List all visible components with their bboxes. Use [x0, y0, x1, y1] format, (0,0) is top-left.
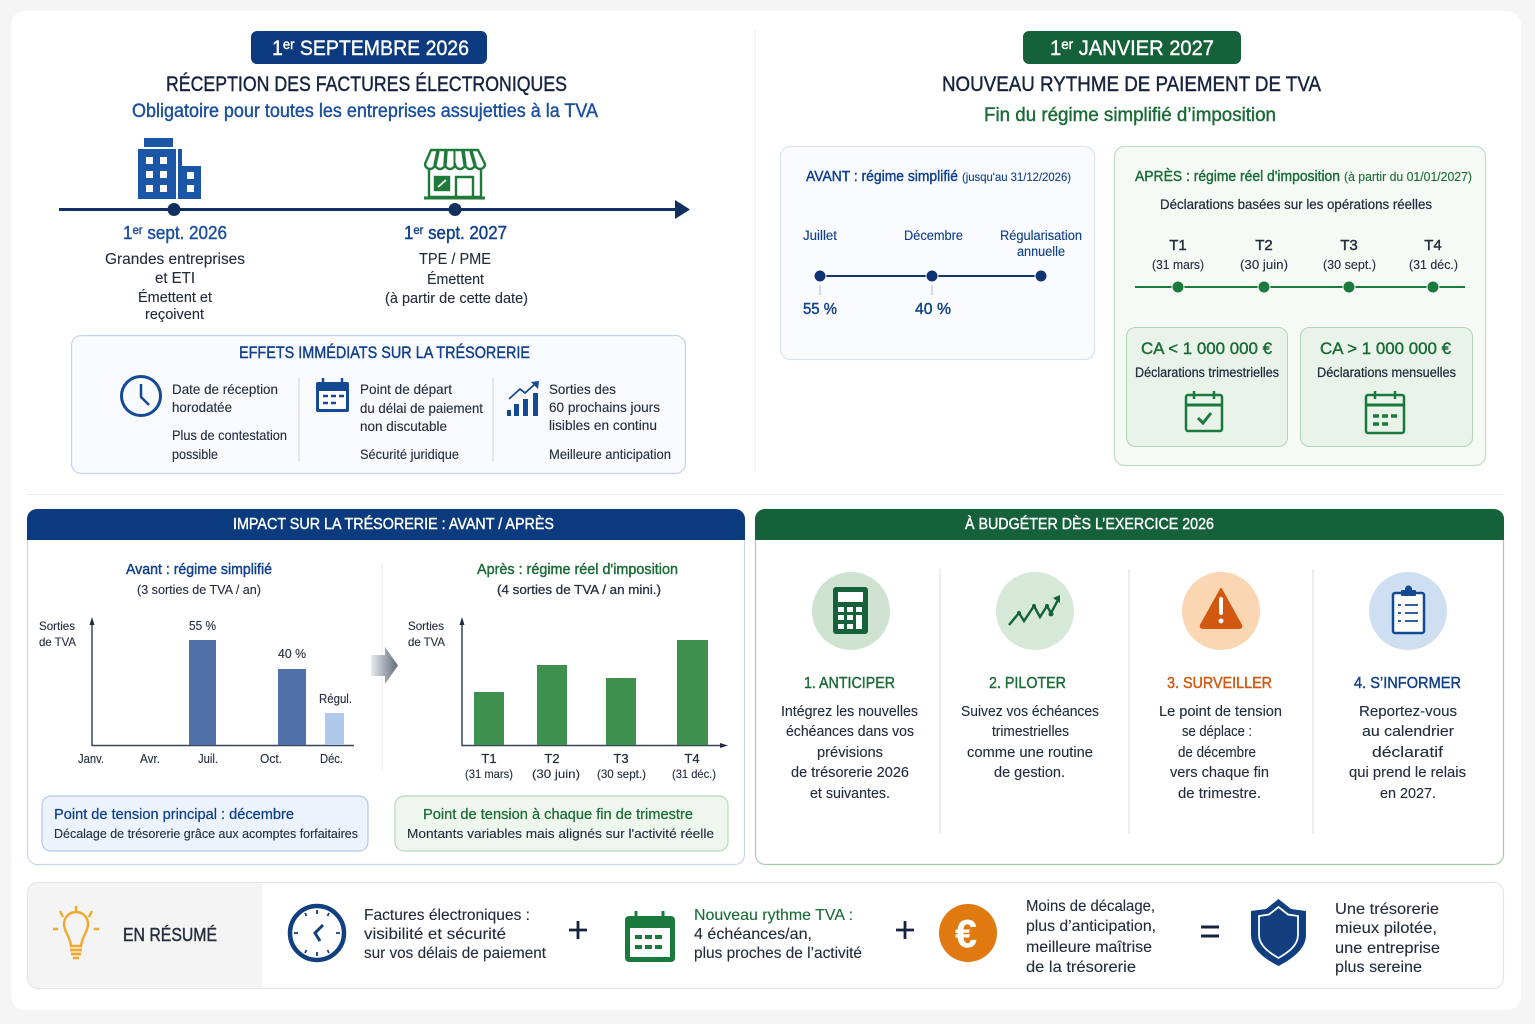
- column: surveiller: [1159, 572, 1282, 802]
- text: une trésorerie: mieux pilotée,: [1335, 920, 1437, 937]
- heading: après: (à partir du 01/01/2027): [1344, 170, 1472, 184]
- heading: avant: [806, 169, 1071, 185]
- timeline step: 1er sept. 2026: er: [132, 223, 143, 237]
- labels: échéances: Décembre: [904, 228, 963, 243]
- text: une trésorerie: une entreprise: [1335, 940, 1440, 957]
- heading: après: APRÈS : régime réel d'imposition: [1135, 168, 1340, 185]
- icon: shield: [1251, 899, 1306, 966]
- bar chart: après: (31 mars): [465, 767, 513, 781]
- bar chart: après: (31 déc.): [672, 767, 716, 781]
- label: en résumé: EN RÉSUMÉ: [123, 925, 217, 945]
- date badge: 1er septembre 2026: SEPTEMBRE 2026: [294, 37, 469, 60]
- column: surveiller: de décembre: [1178, 744, 1256, 761]
- bar chart: avant: de TVA: [39, 635, 76, 649]
- text: déclarations basées: Déclarations basées sur les opérations réelles: [1160, 196, 1432, 212]
- text: date de réception: horodatée: [172, 399, 232, 415]
- text: moins de décalage: plus d’anticipation,: [1026, 918, 1156, 935]
- heading: avant: (jusqu'au 31/12/2026): [962, 170, 1071, 184]
- text: nouveau rythme TVA: 4 échéances/an,: [694, 926, 812, 943]
- column: anticiper: échéances dans vos: [786, 723, 914, 740]
- text: moins de décalage: [1026, 898, 1156, 976]
- timeline step: 1er sept. 2026: 1: [123, 223, 133, 243]
- card: CA supérieur: [1300, 328, 1472, 446]
- timeline: avant: [814, 270, 1047, 295]
- panel: à budgéter: [755, 509, 1504, 864]
- heading: nouveau rythme: NOUVEAU RYTHME DE PAIEMENT DE TVA: [942, 73, 1321, 96]
- panel header: à budgéter: À BUDGÉTER DÈS L’EXERCICE 2026: [965, 516, 1214, 533]
- bar chart: après: T1: [481, 751, 497, 766]
- date badge: 1er septembre 2026: 1: [272, 37, 284, 60]
- text: nouveau rythme TVA: [694, 907, 862, 962]
- text: factures électroniques: Factures électroniques :: [364, 907, 530, 924]
- quarter labels: (30 sept.): [1323, 257, 1376, 272]
- text: factures électroniques: [364, 907, 547, 962]
- text: date de réception: Date de réception: [172, 381, 278, 397]
- bar chart: après: [408, 617, 728, 781]
- heading: effets immédiats: EFFETS IMMÉDIATS SUR LA TRÉSORERIE: [239, 343, 530, 362]
- callout: tension trimestre: [395, 796, 728, 851]
- icon: shop: [424, 150, 485, 198]
- quarter labels: T4: [1424, 237, 1442, 254]
- text: point de départ: Point de départ: [360, 381, 452, 397]
- column: s'informer: 4. S’INFORMER: [1354, 675, 1461, 692]
- quarter labels: T3: [1340, 237, 1358, 254]
- column: piloter: de gestion.: [994, 764, 1065, 781]
- icon: light bulb: [53, 906, 99, 958]
- column: s'informer: déclaratif: [1372, 744, 1444, 761]
- timeline arrow: [59, 200, 690, 219]
- icon: warning: [1182, 572, 1260, 650]
- column: surveiller: Le point de tension: [1159, 703, 1282, 720]
- timeline step: 1er sept. 2026: et ETI: [155, 270, 195, 287]
- timeline step: 1er sept. 2026: Grandes entreprises: [105, 251, 245, 268]
- text: sorties: 60 prochains jours: [549, 399, 660, 415]
- heading: après: [1135, 168, 1472, 185]
- card: CA inférieur: Déclarations trimestrielles: [1135, 365, 1279, 380]
- timeline step: 1er sept. 2027: [385, 223, 528, 307]
- text: date de réception: [172, 381, 287, 462]
- text: nouveau rythme TVA: Nouveau rythme TVA :: [694, 907, 853, 924]
- values: 55 % and 40 %: [803, 301, 951, 318]
- timeline step: 1er sept. 2027: er: [413, 223, 423, 237]
- text: une trésorerie: [1335, 901, 1440, 976]
- text: moins de décalage: meilleure maîtrise: [1026, 939, 1152, 956]
- timeline: trimestres: [1135, 281, 1465, 293]
- arrow: avant vers après: [371, 647, 398, 684]
- column: anticiper: et suivantes.: [810, 785, 890, 802]
- heading: avant: AVANT : régime simplifié: [806, 169, 958, 185]
- icon: calendar: [316, 378, 349, 412]
- bar chart: avant: Déc.: [320, 752, 343, 766]
- icon: office building: [138, 138, 201, 199]
- column: s'informer: [1349, 572, 1466, 802]
- subheading: avant: [126, 562, 272, 597]
- subheading: après: (4 sorties de TVA / an mini.): [497, 582, 661, 597]
- timeline step: 1er sept. 2026: [105, 223, 245, 323]
- bar chart: après: Sorties: [408, 619, 444, 633]
- labels: échéances: [803, 228, 1082, 259]
- callout: tension trimestre: Montants variables mais alignés sur l'activité réelle: [407, 826, 714, 841]
- timeline step: 1er sept. 2026: reçoivent: [145, 306, 205, 323]
- icon: clock: [290, 906, 344, 960]
- bar chart: avant: 40 %: [278, 646, 306, 661]
- column: s'informer: qui prend le relais: [1349, 764, 1466, 781]
- section: 1er janvier 2027: [942, 31, 1321, 126]
- subheading: après: [477, 562, 678, 597]
- quarter labels: T2: [1255, 237, 1273, 254]
- operator: plus: [569, 921, 587, 939]
- text: moins de décalage: de la trésorerie: [1026, 959, 1136, 976]
- quarter labels: (31 mars): [1152, 257, 1204, 272]
- timeline step: 1er sept. 2027: TPE / PME: [419, 251, 491, 268]
- callout: tension trimestre: Point de tension à chaque fin de trimestre: [423, 806, 693, 823]
- subheading: avant: (3 sorties de TVA / an): [137, 582, 261, 597]
- quarter labels: (30 juin): [1240, 257, 1288, 272]
- bar chart: avant: Sorties: [39, 619, 75, 633]
- column: anticiper: [781, 572, 918, 802]
- bar chart: après: T3: [613, 751, 629, 766]
- date badge: 1er septembre 2026: er: [283, 36, 295, 52]
- bar chart: après: T4: [684, 751, 700, 766]
- labels: échéances: Régularisation: [1000, 228, 1082, 243]
- date badge: 1er janvier 2027: er: [1061, 36, 1073, 52]
- bar chart: avant: Avr.: [140, 752, 160, 766]
- panel: impact sur la trésorerie: [27, 509, 745, 864]
- icon: trend line: [996, 572, 1074, 650]
- icon: clipboard: [1369, 572, 1447, 650]
- date badge: 1er septembre 2026: [251, 31, 487, 64]
- card: CA supérieur: CA > 1 000 000 €: [1320, 339, 1452, 358]
- text: moins de décalage: Moins de décalage,: [1026, 898, 1155, 915]
- text: factures électroniques: sur vos délais de paiement: [364, 945, 547, 962]
- panel: effets immédiats: [72, 336, 686, 474]
- column: s'informer: au calendrier: [1362, 723, 1454, 740]
- column: surveiller: vers chaque fin: [1170, 764, 1269, 781]
- timeline step: 1er sept. 2026: Émettent et: [138, 289, 213, 306]
- column: piloter: trimestrielles: [992, 723, 1069, 740]
- icon: calendar check: [1186, 391, 1222, 431]
- panel: après régime réel: [1114, 146, 1486, 466]
- date badge: 1er janvier 2027: JANVIER 2027: [1073, 37, 1214, 60]
- date badge: 1er janvier 2027: [1023, 31, 1241, 64]
- text: point de départ: Sécurité juridique: [360, 446, 459, 462]
- text: nouveau rythme TVA: plus proches de l’activité: [694, 945, 862, 962]
- text: date de réception: Plus de contestation: [172, 427, 287, 443]
- bar chart: après: T2: [544, 751, 560, 766]
- panel header: impact: [27, 509, 745, 540]
- subheading: après: Après : régime réel d'imposition: [477, 562, 678, 578]
- text: point de départ: du délai de paiement: [360, 400, 483, 416]
- text: point de départ: [360, 381, 483, 462]
- quarter labels: T1: [1169, 237, 1187, 254]
- panel: en résumé: [28, 882, 1504, 988]
- icon: calendar grid: [1366, 391, 1404, 433]
- callout: tension décembre: Point de tension principal : décembre: [54, 806, 294, 823]
- column: surveiller: de trimestre.: [1178, 785, 1261, 802]
- bar chart: après: de TVA: [408, 635, 445, 649]
- operator: equals: [1201, 927, 1219, 936]
- text: une trésorerie: plus sereine: [1335, 959, 1422, 976]
- bar chart: après: (30 sept.): [597, 767, 646, 781]
- text: factures électroniques: visibilité et sécurité: [364, 926, 506, 943]
- column: anticiper: prévisions: [817, 744, 883, 761]
- text: point de départ: non discutable: [360, 418, 447, 434]
- quarter labels: [1152, 237, 1458, 272]
- labels: échéances: annuelle: [1017, 244, 1065, 259]
- column: anticiper: de trésorerie 2026: [791, 764, 909, 781]
- column: piloter: 2. PILOTER: [989, 675, 1066, 692]
- text: sorties: Sorties des: [549, 381, 616, 397]
- bar chart: avant: [39, 617, 354, 766]
- column: surveiller: se déplace :: [1182, 723, 1252, 740]
- timeline step: 1er sept. 2027: Émettent: [427, 271, 485, 288]
- timeline step: 1er sept. 2027: sept. 2027: [423, 223, 507, 243]
- date badge: 1er janvier 2027: 1: [1050, 37, 1062, 60]
- bar chart: avant: Régul.: [319, 691, 352, 706]
- quarter labels: (31 déc.): [1409, 257, 1458, 272]
- icon: euro coin: [939, 904, 997, 962]
- bar chart: avant: Oct.: [260, 752, 282, 766]
- card: CA inférieur: CA < 1 000 000 €: [1141, 339, 1273, 358]
- text: date de réception: possible: [172, 446, 218, 462]
- bar chart: avant: 55 %: [189, 618, 216, 633]
- text: sorties: lisibles en continu: [549, 417, 657, 433]
- callout: tension décembre: [42, 796, 368, 851]
- timeline step: 1er sept. 2026: sept. 2026: [143, 223, 227, 243]
- bar chart: avant: Juil.: [198, 752, 218, 766]
- text: sorties: Meilleure anticipation: [549, 446, 671, 462]
- icon: calendar: [625, 911, 675, 962]
- panel header: impact: IMPACT SUR LA TRÉSORERIE : AVANT / APRÈS: [233, 516, 554, 533]
- column: anticiper: Intégrez les nouvelles: [781, 703, 918, 720]
- icon: calculator: [812, 572, 890, 650]
- column: s'informer: Reportez-vous: [1359, 703, 1457, 720]
- column: piloter: comme une routine: [967, 744, 1093, 761]
- values: 55 % and 40 %: 40 %: [915, 301, 951, 318]
- callout: tension décembre: Décalage de trésorerie grâce aux acomptes forfaitaires: [54, 826, 358, 841]
- text: sorties: [549, 381, 671, 462]
- operator: plus: [896, 921, 914, 939]
- icon: rising chart: [507, 381, 539, 416]
- icon: clock: [122, 376, 160, 416]
- timeline step: 1er sept. 2027: 1: [404, 223, 414, 243]
- column: anticiper: 1. ANTICIPER: [804, 675, 895, 692]
- labels: échéances: Juillet: [803, 228, 837, 243]
- icon: euro coin: €: [955, 913, 977, 956]
- column: s'informer: en 2027.: [1380, 785, 1436, 802]
- subtitle: fin du régime simplifié: Fin du régime simplifié d’imposition: [984, 105, 1276, 126]
- column: piloter: Suivez vos échéances: [961, 703, 1099, 720]
- text: une trésorerie: Une trésorerie: [1335, 901, 1439, 918]
- card: CA inférieur: [1126, 328, 1288, 446]
- heading: réception des factures: RÉCEPTION DES FACTURES ÉLECTRONIQUES: [166, 73, 567, 96]
- timeline step: 1er sept. 2027: (à partir de cette date): [385, 290, 528, 307]
- bar chart: avant: Janv.: [78, 752, 104, 766]
- subtitle: obligatoire: Obligatoire pour toutes les entreprises assujetties à la TVA: [132, 101, 598, 122]
- panel: avant régime simplifié: [780, 146, 1094, 360]
- section: 1er septembre 2026: [132, 31, 598, 122]
- panel header: à budgéter: [755, 509, 1504, 540]
- column: piloter: [961, 572, 1099, 781]
- card: CA supérieur: Déclarations mensuelles: [1317, 365, 1456, 380]
- bar chart: après: (30 juin): [532, 767, 580, 781]
- values: 55 % and 40 %: 55 %: [803, 301, 837, 318]
- subheading: avant: Avant : régime simplifié: [126, 562, 272, 578]
- column: surveiller: 3. SURVEILLER: [1167, 675, 1272, 692]
